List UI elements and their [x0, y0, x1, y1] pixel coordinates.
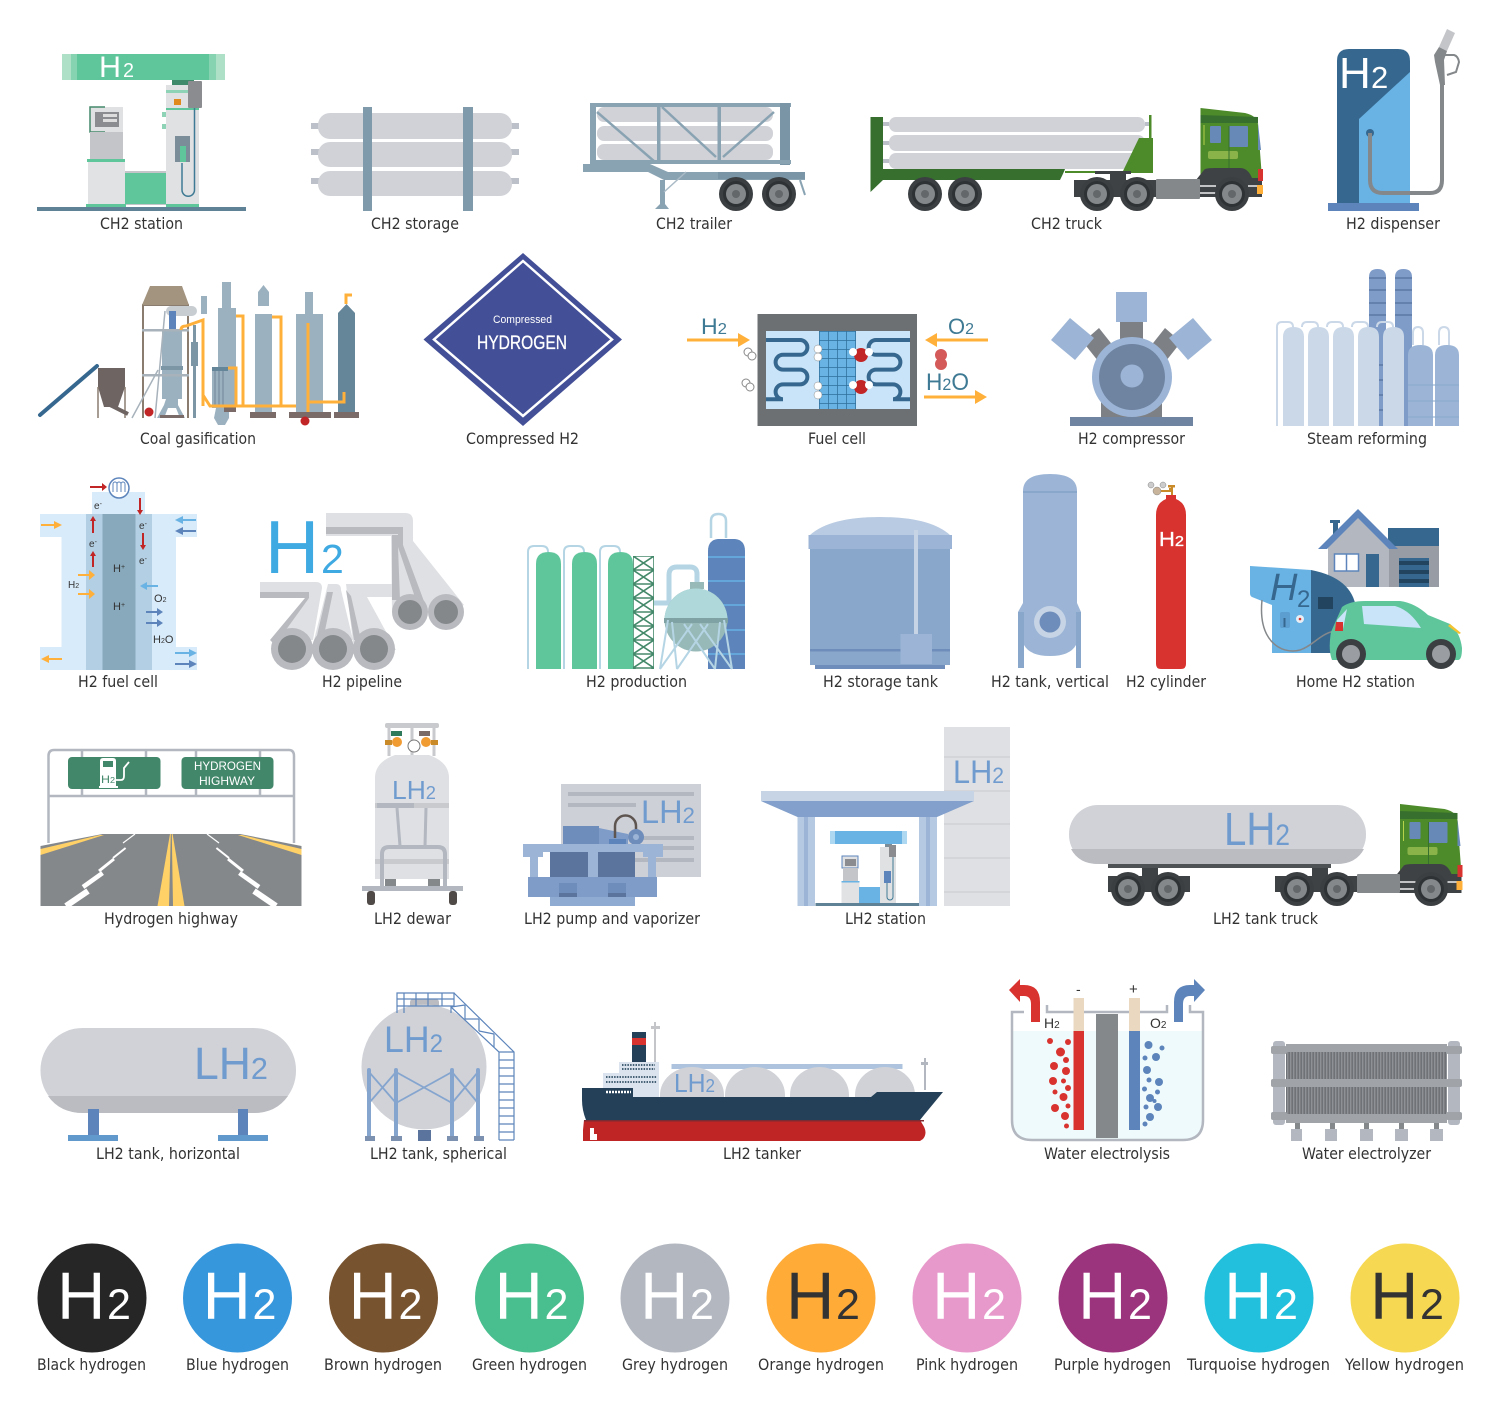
panel: Home H2 station — [1250, 509, 1462, 691]
badge — [329, 1244, 438, 1352]
panel: LH2 tanker — [582, 1022, 943, 1163]
label: H2 production — [586, 672, 687, 691]
arrow: H2 in — [687, 333, 750, 347]
badge: H — [932, 1259, 980, 1334]
label: LH2 tank, spherical — [370, 1144, 507, 1163]
icon: PEM fuel cell diagram: H2 — [68, 580, 79, 591]
badge — [38, 1244, 146, 1352]
icon: gasification plant — [40, 282, 359, 426]
icon: PEM fuel cell diagram: H2O — [153, 634, 174, 646]
icon: electrolysis cell: - — [1076, 981, 1081, 997]
label: H2 dispenser — [1346, 214, 1440, 233]
icon: gas cylinder — [1148, 482, 1186, 669]
icon: pipeline — [260, 505, 464, 670]
icon: home dispenser: H — [1270, 567, 1298, 609]
arrow: oxygen out — [1174, 979, 1205, 1022]
badge: H — [640, 1259, 688, 1334]
panel: Water electrolysis — [1009, 979, 1205, 1163]
icon: spherical tank: LH2 — [384, 1019, 443, 1060]
icon: CH2 station: H — [99, 51, 121, 84]
label: Turquoise hydrogen — [1186, 1355, 1330, 1374]
icon: PEM fuel cell diagram: e — [139, 521, 145, 532]
arrow: H2O out — [924, 390, 987, 404]
panel: Turquoise hydrogen — [1186, 1244, 1330, 1374]
panel: Compressed H2 — [424, 253, 622, 448]
panel: H2 production — [528, 514, 745, 691]
panel: CH2 trailer — [583, 103, 805, 233]
icon: pipeline: H — [265, 505, 319, 589]
icon: canopy and pumps — [761, 791, 974, 906]
icon: house — [1318, 509, 1439, 587]
badge — [183, 1244, 292, 1352]
badge — [620, 1244, 730, 1352]
icon: compressor — [1051, 292, 1212, 426]
icon: PEM fuel cell diagram: - — [145, 556, 148, 563]
label: LH2 pump and vaporizer — [524, 909, 700, 928]
icon: tube trailer — [583, 103, 805, 211]
panel: LH2 tank, spherical — [362, 993, 514, 1163]
label: Orange hydrogen — [758, 1355, 884, 1374]
icon: home dispenser — [1250, 566, 1356, 653]
label: CH2 truck — [1031, 214, 1103, 233]
icon: horizontal tank — [40, 1028, 296, 1141]
panel: LH2 tank, horizontal — [40, 1028, 296, 1163]
badge: H — [57, 1259, 105, 1334]
icon: PEM fuel cell diagram: + — [121, 564, 125, 571]
panel: H2 tank, vertical — [991, 474, 1109, 691]
icon: tower: LH2 — [953, 754, 1004, 790]
badge — [475, 1244, 584, 1352]
panel: LH2 tank truck — [1069, 803, 1462, 928]
icon: electrolysis cell: + — [1129, 981, 1138, 998]
label: Home H2 station — [1296, 672, 1415, 691]
label: Pink hydrogen — [916, 1355, 1018, 1374]
badge: 2 — [982, 1281, 1006, 1329]
icon: electrolysis cell — [1009, 979, 1205, 1140]
icon: storage tanks — [311, 107, 519, 211]
badge: H — [1370, 1259, 1418, 1334]
panel: CH2 station — [37, 51, 246, 233]
badge: H — [348, 1259, 397, 1334]
badge: H — [1078, 1259, 1126, 1334]
label: Water electrolysis — [1044, 1144, 1170, 1163]
icon: PEM fuel cell diagram: - — [95, 539, 98, 546]
label: H2 pipeline — [322, 672, 402, 691]
badge: H — [202, 1259, 251, 1334]
label: Yellow hydrogen — [1344, 1355, 1464, 1374]
panel: LH2 pump and vaporizer — [523, 784, 701, 928]
badge: H — [786, 1259, 834, 1334]
icon: gas cylinder: H2 — [1159, 529, 1184, 551]
icon: pump and board: LH2 — [641, 794, 695, 830]
label: Purple hydrogen — [1054, 1355, 1171, 1374]
badge: 2 — [398, 1281, 422, 1329]
panel: H2 compressor — [1051, 292, 1212, 448]
icon: pump and board — [523, 784, 701, 906]
label: LH2 tank, horizontal — [96, 1144, 240, 1163]
icon: PEM fuel cell diagram — [40, 478, 197, 670]
icon: dispenser: H — [1339, 49, 1371, 98]
panel: Purple hydrogen — [1054, 1244, 1171, 1374]
panel: CH2 truck — [870, 108, 1263, 233]
icon: green car — [1330, 601, 1462, 669]
badge: 2 — [544, 1281, 568, 1329]
icon: PEM fuel cell diagram: + — [121, 602, 125, 609]
label: CH2 storage — [371, 214, 459, 233]
icon: fuel cell diagram: H2 — [701, 314, 727, 339]
badge: 2 — [690, 1281, 714, 1329]
panel: Yellow hydrogen — [1344, 1244, 1464, 1374]
panel: Steam reforming — [1277, 269, 1459, 448]
label: LH2 station — [845, 909, 926, 928]
icon: tanker ship — [582, 1022, 943, 1141]
icon: dewar: LH2 — [392, 775, 436, 805]
panel: Green hydrogen — [472, 1244, 587, 1374]
icon: fuel cell diagram — [687, 314, 988, 426]
icon: home dispenser: 2 — [1297, 586, 1310, 613]
panel: Grey hydrogen — [620, 1244, 730, 1374]
badge — [1058, 1244, 1168, 1352]
icon: fuel cell diagram: O2 — [948, 314, 974, 339]
icon: gantry signs — [48, 750, 294, 843]
icon: hazard diamond — [424, 253, 622, 426]
icon: tanker ship: LH2 — [674, 1068, 715, 1098]
badge: H — [494, 1259, 543, 1334]
label: H2 fuel cell — [78, 672, 158, 691]
icon: PEM fuel cell diagram: - — [100, 501, 103, 508]
panel: Orange hydrogen — [758, 1244, 884, 1374]
icon: PEM fuel cell diagram: O2 — [154, 593, 167, 605]
icon: dispenser — [1328, 29, 1459, 211]
panel: H2 fuel cell — [40, 478, 197, 691]
panel: Blue hydrogen — [183, 1244, 292, 1374]
label: Coal gasification — [140, 429, 256, 448]
badge: 2 — [107, 1281, 131, 1329]
panel: Pink hydrogen — [912, 1244, 1022, 1374]
icon: storage tank — [808, 517, 952, 669]
label: Black hydrogen — [37, 1355, 146, 1374]
icon: pipeline: 2 — [321, 536, 344, 582]
panel: H2 cylinder — [1126, 482, 1206, 691]
panel: H2 dispenser — [1328, 29, 1459, 233]
icon: tube truck — [870, 108, 1263, 211]
icon: PEM fuel cell diagram: H — [113, 563, 121, 575]
icon: gantry signs: HYDROGEN — [194, 759, 261, 773]
panel: Coal gasification — [40, 282, 359, 448]
label: Fuel cell — [808, 429, 866, 448]
icon: tower — [944, 727, 1010, 906]
panel: H2 storage tank — [808, 517, 952, 691]
icon: fuel cell diagram: H2O — [926, 369, 969, 396]
icon: PEM fuel cell diagram: - — [145, 521, 148, 528]
panel: LH2 station — [761, 727, 1010, 928]
icon: PEM fuel cell diagram: e — [139, 556, 145, 567]
label: H2 storage tank — [823, 672, 939, 691]
icon: electrolysis cell: H2 — [1044, 1015, 1060, 1031]
label: Hydrogen highway — [104, 909, 238, 928]
panel: Black hydrogen — [37, 1244, 146, 1374]
label: Grey hydrogen — [622, 1355, 728, 1374]
label: Brown hydrogen — [324, 1355, 442, 1374]
panel: Brown hydrogen — [324, 1244, 442, 1374]
panel: CH2 storage — [311, 107, 519, 233]
label: H2 cylinder — [1126, 672, 1206, 691]
icon: tanker truck: LH2 — [1224, 803, 1290, 855]
label: H2 compressor — [1078, 429, 1185, 448]
label: CH2 station — [100, 214, 183, 233]
icon: PEM fuel cell diagram: H — [113, 601, 121, 613]
label: LH2 tank truck — [1213, 909, 1319, 928]
icon: CH2 station — [37, 51, 246, 211]
icon: gantry signs: H2 — [101, 774, 116, 786]
panel: Water electrolyzer — [1271, 1041, 1462, 1163]
label: LH2 tanker — [723, 1144, 801, 1163]
badge — [766, 1244, 876, 1352]
icon: electrolyzer stack — [1271, 1041, 1462, 1141]
label: Water electrolyzer — [1302, 1144, 1431, 1163]
label: H2 tank, vertical — [991, 672, 1109, 691]
panel: Hydrogen highway — [40, 750, 302, 928]
icon: dewar — [362, 723, 463, 905]
icon: reformer plant — [1277, 269, 1459, 426]
badge — [912, 1244, 1022, 1352]
icon: dispenser: 2 — [1371, 60, 1388, 95]
icon: PEM fuel cell diagram: e — [89, 539, 95, 550]
icon: vertical tank — [1018, 474, 1081, 668]
panel: LH2 dewar — [362, 723, 463, 928]
arrow: O2 in — [925, 333, 988, 347]
icon: production plant — [528, 514, 745, 669]
icon: gantry signs: HIGHWAY — [199, 774, 255, 788]
badge: 2 — [1128, 1281, 1152, 1329]
icon: tanker truck — [1069, 803, 1462, 906]
panel: Fuel cell — [687, 314, 988, 448]
icon: road — [40, 834, 302, 906]
label: Green hydrogen — [472, 1355, 587, 1374]
badge: 2 — [836, 1281, 860, 1329]
badge: H — [1224, 1259, 1272, 1334]
panel: H2 pipeline — [260, 505, 464, 691]
badge: 2 — [1420, 1281, 1444, 1329]
badge — [1350, 1244, 1460, 1352]
icon: electrolysis cell: O2 — [1150, 1015, 1167, 1031]
badge — [1204, 1244, 1314, 1352]
icon: PEM fuel cell diagram: e — [94, 501, 100, 512]
icon: hazard diamond: Compressed — [493, 314, 552, 326]
label: Compressed H2 — [466, 429, 579, 448]
arrow: hydrogen out — [1009, 979, 1040, 1022]
icon: spherical tank — [362, 993, 514, 1141]
label: Steam reforming — [1307, 429, 1427, 448]
label: CH2 trailer — [656, 214, 732, 233]
label: LH2 dewar — [374, 909, 451, 928]
icon: hazard diamond: HYDROGEN — [477, 333, 567, 354]
icon: horizontal tank: LH2 — [194, 1038, 268, 1089]
icon: CH2 station: 2 — [123, 60, 134, 82]
label: Blue hydrogen — [186, 1355, 289, 1374]
badge: 2 — [1274, 1281, 1298, 1329]
badge: 2 — [252, 1281, 276, 1329]
